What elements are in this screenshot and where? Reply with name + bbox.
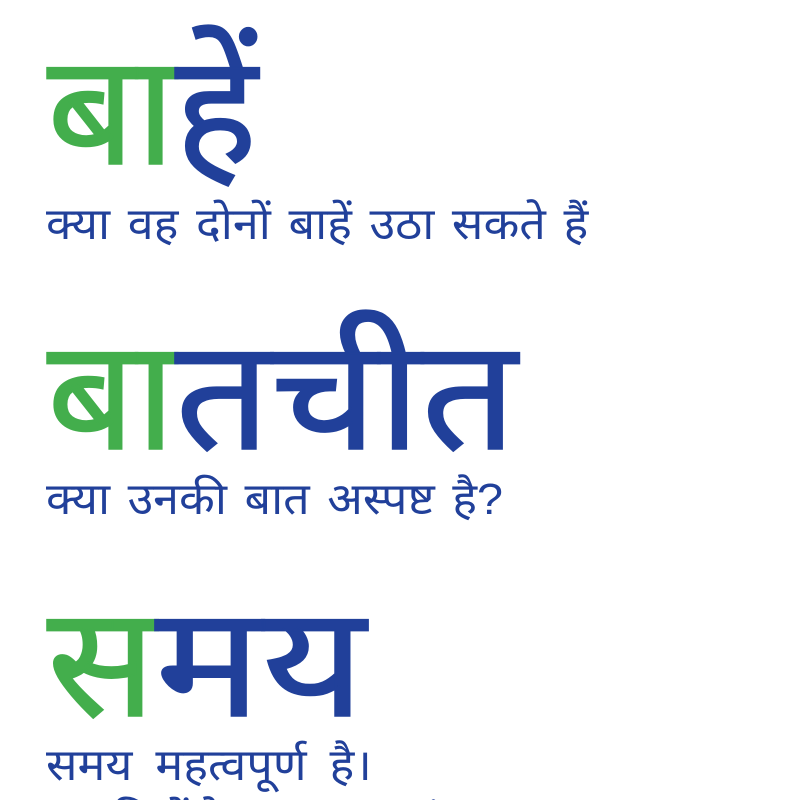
heading: time: स [47,576,156,749]
heading: arms: हें [175,24,257,197]
heading: time: मय [155,576,366,749]
heading: arms [46,24,260,197]
text: time statement: समय महत्वपूर्ण है। [46,741,372,790]
text: speech question: क्या उनकी बात अस्पष्ट है? [46,475,503,524]
text: arms question: क्या वह दोनों बाहें उठा सकते हैं [46,200,588,249]
heading: speech: तचीत [175,309,517,482]
heading: time [46,576,369,749]
heading: arms: बा [47,24,176,197]
heading: speech: बा [47,309,176,482]
